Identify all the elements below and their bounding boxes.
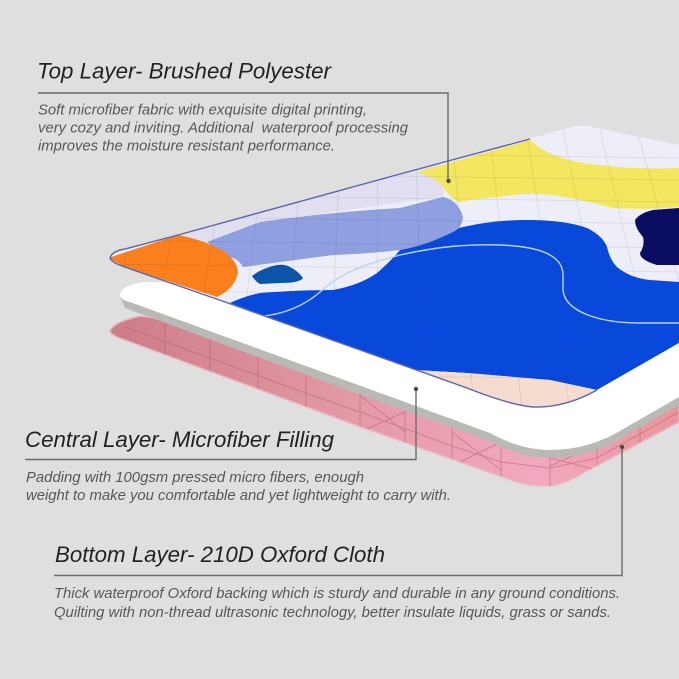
central layer: white microfiber filling xyxy=(120,282,679,458)
text block: top layer description xyxy=(38,102,408,154)
periwinkle shape xyxy=(207,197,463,267)
text block: top layer description: Soft microfiber fabric with exquisite digital printing, xyxy=(38,102,367,118)
quilting lines xyxy=(89,130,679,410)
leader line: top layer xyxy=(38,93,451,183)
bottom layer: pink oxford cloth xyxy=(110,316,679,490)
heading: central layer: Central Layer- Microfiber Filling xyxy=(25,427,334,452)
upper lavender shape xyxy=(178,160,444,242)
text block: bottom layer description xyxy=(54,586,620,621)
heading: top layer: Top Layer- Brushed Polyester xyxy=(37,58,332,84)
text block: bottom layer description: Quilting with non-thread ultrasonic technology, better insulate liquids, grass or sands. xyxy=(54,605,611,621)
heading: bottom layer: Bottom Layer- 210D Oxford Cloth xyxy=(55,542,385,567)
orange shape xyxy=(108,235,238,297)
top layer: printed quilt xyxy=(89,126,679,410)
yellow band xyxy=(417,140,679,209)
royal blue field xyxy=(230,220,679,390)
quilt piping xyxy=(110,139,597,407)
text block: central layer description: weight to make you comfortable and yet lightweight to carry with. xyxy=(26,488,451,504)
text block: top layer description: improves the moisture resistant performance. xyxy=(38,138,335,154)
navy shape xyxy=(635,208,679,265)
text block: central layer description: Padding with 100gsm pressed micro fibers, enough xyxy=(26,470,364,486)
leader line: bottom layer xyxy=(54,445,624,576)
text block: central layer description xyxy=(26,470,451,504)
text block: top layer description: very cozy and inviting. Additional waterproof processing xyxy=(38,120,408,136)
teal blob xyxy=(252,265,303,284)
white curve line xyxy=(263,245,679,323)
peach corner xyxy=(415,370,597,407)
text block: bottom layer description: Thick waterproof Oxford backing which is sturdy and durable in any ground conditions. xyxy=(54,586,620,602)
leader line: central layer xyxy=(25,387,418,460)
